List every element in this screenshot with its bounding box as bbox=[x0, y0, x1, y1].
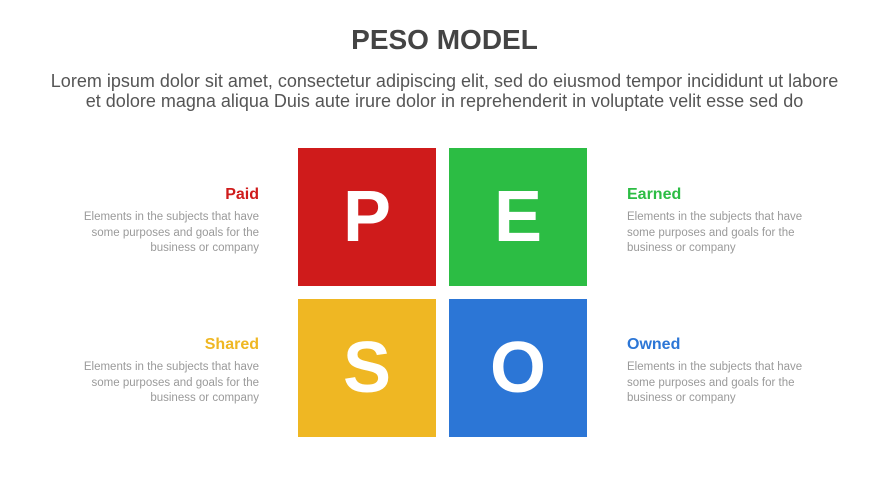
square: O: O bbox=[490, 328, 546, 408]
text: Earned bbox=[627, 186, 802, 254]
text: Paid bbox=[84, 186, 259, 254]
subtitle: Lorem ipsum dolor sit amet, consectetur adipiscing elit, sed do eiusmod tempor incididunt ut labore bbox=[51, 71, 838, 91]
text: Earned: Earned bbox=[627, 186, 681, 203]
title: PESO MODEL bbox=[351, 24, 538, 55]
text: Shared: Elements in the subjects that have some purposes and goals for the business or company bbox=[84, 361, 259, 404]
text: Owned bbox=[627, 336, 802, 404]
square: O bbox=[449, 299, 587, 437]
text: Owned: Owned bbox=[627, 336, 680, 353]
square: S: S bbox=[343, 328, 391, 408]
square: P: P bbox=[343, 177, 391, 257]
text: Paid: Paid bbox=[225, 186, 259, 203]
square: S bbox=[298, 299, 436, 437]
text: Shared bbox=[84, 336, 259, 404]
text: Owned: Elements in the subjects that have some purposes and goals for the business or company bbox=[627, 361, 802, 404]
square: E bbox=[449, 148, 587, 286]
text: Shared: Shared bbox=[205, 336, 259, 353]
subtitle bbox=[51, 71, 838, 111]
text: Paid: Elements in the subjects that have some purposes and goals for the business or company bbox=[84, 211, 259, 254]
square: E: E bbox=[494, 177, 542, 257]
square: P bbox=[298, 148, 436, 286]
subtitle: et dolore magna aliqua Duis aute irure dolor in reprehenderit in voluptate velit esse sed do bbox=[86, 91, 803, 111]
text: Earned: Elements in the subjects that have some purposes and goals for the business or company bbox=[627, 211, 802, 254]
